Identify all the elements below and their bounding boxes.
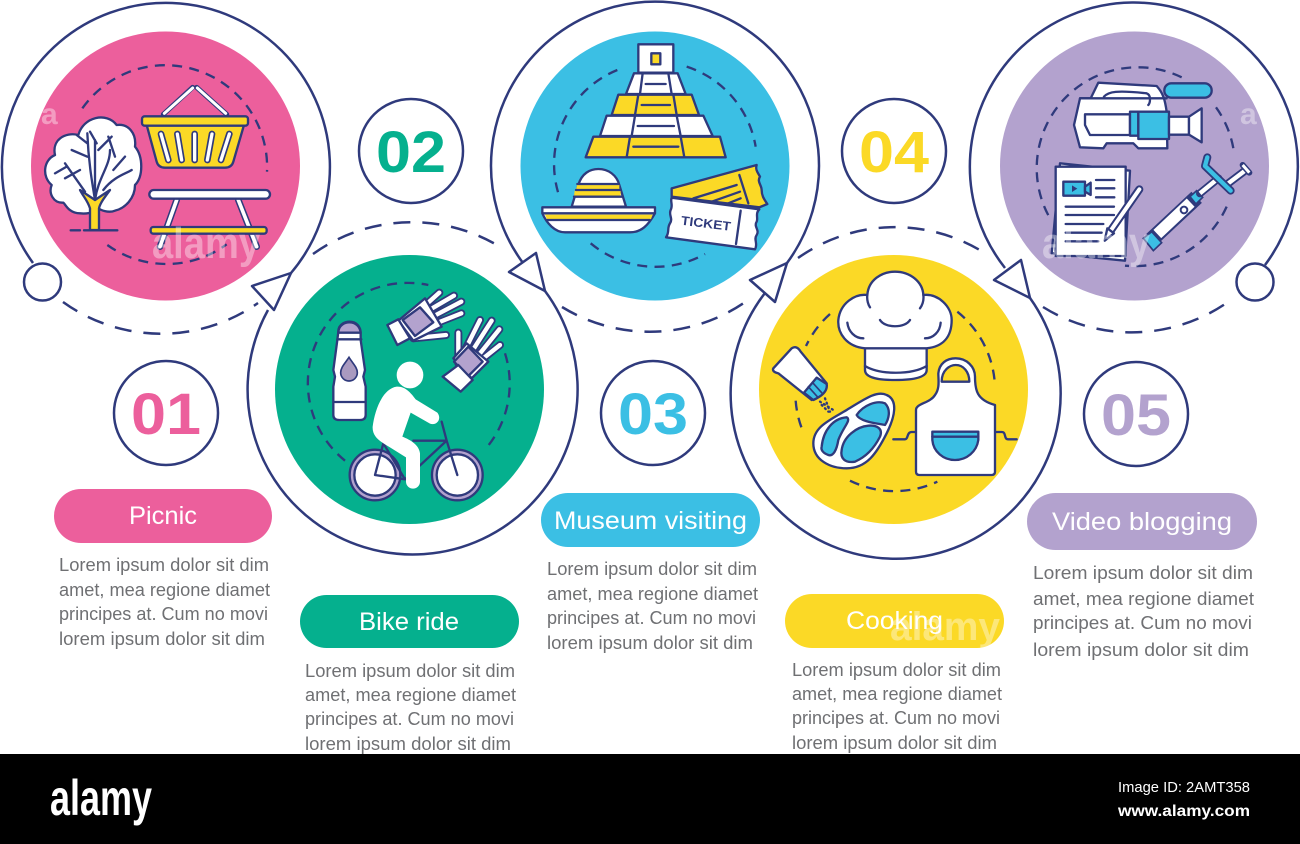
text block: Museum visiting: Lorem ipsum dolor sit dim [547, 559, 757, 579]
number badge 01 [114, 361, 218, 465]
icons: bottle, gloves and cyclist [308, 283, 510, 500]
text block: Video blogging: lorem ipsum dolor sit dim [1033, 640, 1249, 660]
text block: Video blogging: amet, mea regione diamet [1033, 589, 1254, 609]
text block: Bike ride: lorem ipsum dolor sit dim [305, 734, 511, 754]
panel: video blogging circle [1000, 32, 1269, 300]
number badge 03: 03 [618, 382, 688, 447]
number badge 04: 04 [859, 120, 929, 185]
text block: Picnic: principes at. Cum no movi [59, 604, 268, 624]
heading pill: Picnic: Picnic [129, 502, 197, 530]
number badge 01: 01 [131, 382, 201, 447]
text block: Picnic: amet, mea regione diamet [59, 580, 270, 600]
footer image id: Image ID: 2AMT358 [1118, 779, 1250, 796]
stock watermarks [41, 98, 1257, 649]
number badge 04 [842, 99, 946, 203]
heading pill: Video blogging [1027, 493, 1257, 550]
number badge 02 [359, 99, 463, 203]
heading pill: Museum visiting [541, 493, 760, 547]
heading pill: Picnic [54, 489, 272, 543]
text block: Museum visiting: lorem ipsum dolor sit dim [547, 633, 753, 653]
panel: cooking circle [759, 255, 1028, 524]
outer connector arcs and arrows [2, 2, 1298, 559]
text block: Cooking: amet, mea regione diamet [792, 684, 1002, 704]
heading pill: Bike ride [300, 595, 519, 648]
panel: bike ride circle [275, 255, 544, 524]
stock watermarks: alamy [1042, 219, 1150, 268]
icons: chef hat, shaker, meat and apron [773, 272, 1017, 491]
text block: Picnic: Lorem ipsum dolor sit dim [59, 555, 269, 575]
footer bar [0, 754, 1300, 844]
text block: Video blogging: Lorem ipsum dolor sit dim [1033, 563, 1253, 583]
heading pill: Bike ride: Bike ride [359, 608, 459, 636]
stock watermarks: alamy [152, 219, 260, 268]
text block: Bike ride: principes at. Cum no movi [305, 709, 514, 729]
text block: Bike ride: amet, mea regione diamet [305, 685, 516, 705]
number badge 02: 02 [376, 120, 446, 185]
text block: Bike ride [305, 661, 516, 754]
text block: Cooking: lorem ipsum dolor sit dim [792, 733, 997, 753]
panel: museum visiting circle [520, 32, 790, 300]
text block: Museum visiting: principes at. Cum no movi [547, 608, 756, 628]
icons: video camera, script and selfie stick [1037, 67, 1249, 266]
text block: Cooking: Lorem ipsum dolor sit dim [792, 660, 1001, 680]
heading pill: Cooking: Cooking [846, 607, 943, 635]
stock watermarks: alamy [890, 605, 1001, 649]
text block: Museum visiting [547, 559, 758, 653]
panel: picnic circle [31, 32, 300, 300]
stock watermarks: a [1240, 98, 1257, 131]
text block: Video blogging [1033, 563, 1254, 660]
heading pill: Cooking [785, 594, 1004, 648]
heading pill: Video blogging: Video blogging [1052, 508, 1232, 536]
footer logo: alamy [50, 770, 152, 826]
stock watermarks: a [41, 98, 58, 131]
text block: Bike ride: Lorem ipsum dolor sit dim [305, 661, 515, 681]
icons: pyramid, sombrero and tickets: TICKET [680, 214, 732, 234]
number badge 05: 05 [1101, 383, 1171, 448]
text block: Cooking: principes at. Cum no movi [792, 708, 1000, 728]
text block: Picnic: lorem ipsum dolor sit dim [59, 629, 265, 649]
footer website: www.alamy.com [1117, 803, 1250, 820]
text block: Museum visiting: amet, mea regione diamet [547, 584, 758, 604]
icons: pyramid, sombrero and tickets [542, 44, 767, 267]
heading pill: Museum visiting: Museum visiting [554, 507, 747, 535]
text block: Video blogging: principes at. Cum no movi [1033, 613, 1252, 633]
text block: Cooking [792, 660, 1002, 753]
text block: Picnic [59, 555, 270, 649]
number badge 03 [601, 361, 705, 465]
number badge 05 [1084, 362, 1188, 466]
icons: picnic tree, basket and table [45, 65, 270, 264]
